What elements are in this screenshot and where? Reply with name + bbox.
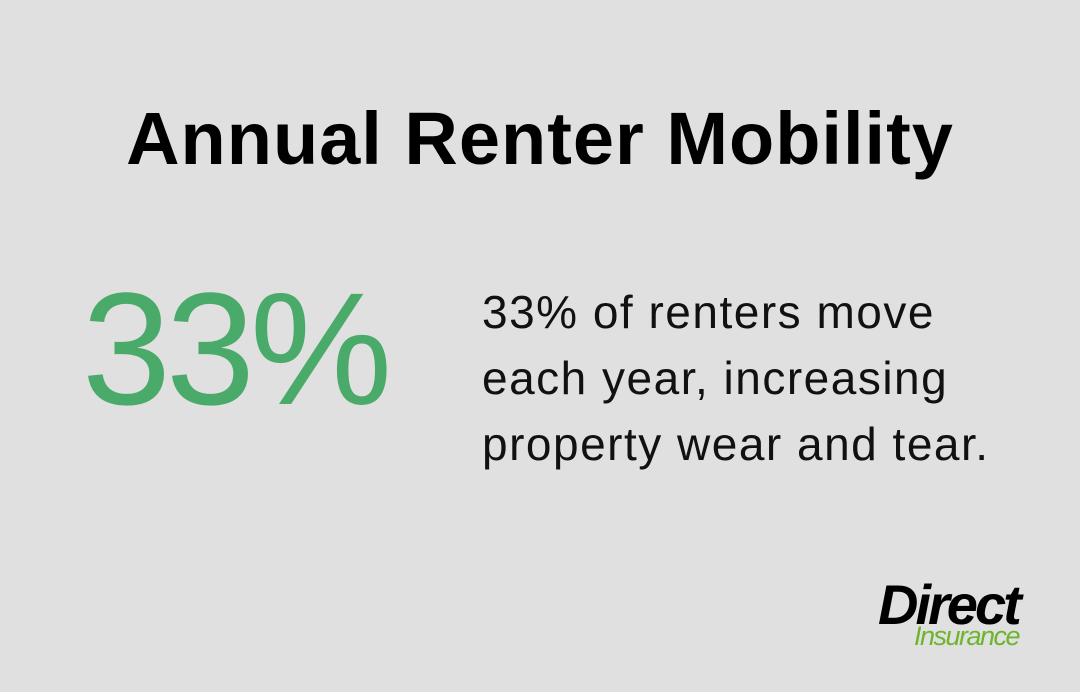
- description text: each year, increasing: [482, 352, 948, 404]
- description text: property wear and tear.: [482, 418, 990, 470]
- description text: [482, 286, 990, 470]
- big stat: 33%: [82, 259, 387, 438]
- logo: Direct: [878, 573, 1019, 636]
- logo: Insurance: [914, 621, 1019, 651]
- title: Annual Renter Mobility: [126, 97, 954, 180]
- description text: 33% of renters move: [482, 286, 935, 338]
